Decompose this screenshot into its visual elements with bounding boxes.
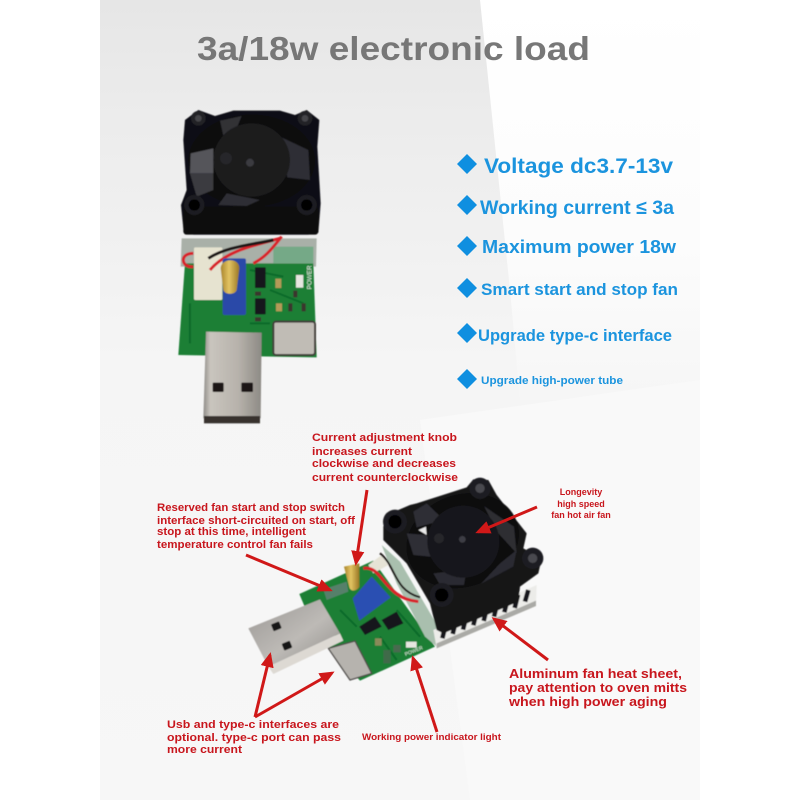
power marking: POWER xyxy=(404,645,424,658)
fan xyxy=(383,478,543,633)
heat sink side xyxy=(382,545,440,647)
black chips xyxy=(255,267,266,314)
chips and components xyxy=(359,612,417,663)
fan xyxy=(181,110,321,235)
feature: working current: Working current ≤ 3a xyxy=(480,197,674,219)
feature: voltage: Voltage dc3.7-13v xyxy=(484,155,673,178)
power marking: POWER xyxy=(306,265,313,289)
circuit board xyxy=(299,561,435,681)
feature: type-c: Upgrade type-c interface xyxy=(478,327,672,345)
heat sink xyxy=(181,238,317,267)
arrow: heat sink xyxy=(494,619,548,660)
arrow: fan switch xyxy=(246,555,330,590)
callout: fan: high speed xyxy=(557,499,605,509)
callout: heat sheet: when high power aging xyxy=(508,694,667,709)
USB-A plug xyxy=(203,332,262,423)
callout: USB and type-c: Usb and type-c interfaces are xyxy=(167,719,339,731)
callout: current adjustment knob: Current adjustment knob xyxy=(312,432,457,444)
callout: heat sheet: Aluminum fan heat sheet, xyxy=(509,666,682,681)
callout: power indicator: Working power indicator light xyxy=(362,732,501,742)
product photo: angled view of electronic load xyxy=(248,478,543,681)
feature: high-power tube: Upgrade high-power tube xyxy=(481,375,623,387)
callout: reserved fan switch: Reserved fan start and stop switch xyxy=(157,502,345,514)
callout: current adjustment knob: increases current xyxy=(312,446,412,458)
product photo: top view of electronic load xyxy=(178,110,321,423)
feature: maximum power: Maximum power 18w xyxy=(482,237,677,257)
callout: reserved fan switch: interface short-circuited on start, off xyxy=(157,515,355,527)
USB-C port xyxy=(328,641,372,680)
feature list xyxy=(457,154,678,389)
wires xyxy=(183,237,282,270)
wires xyxy=(363,568,418,602)
callout: current adjustment knob: current counterclockwise xyxy=(312,472,458,484)
blue potentiometer xyxy=(223,258,246,315)
arrow: knob xyxy=(356,490,367,563)
callout: reserved fan switch: temperature control fan fails xyxy=(157,539,313,551)
blue potentiometer xyxy=(353,577,391,621)
callout: heat sheet: pay attention to oven mitts xyxy=(509,680,687,695)
background panel xyxy=(100,0,700,800)
callout: current adjustment knob: clockwise and decreases xyxy=(312,458,456,470)
arrow: power light xyxy=(413,658,437,732)
callout: reserved fan switch: stop at this time, intelligent xyxy=(157,526,306,538)
callout: fan: Longevity xyxy=(560,487,602,497)
callout arrows xyxy=(246,490,548,732)
feature: high-power tube xyxy=(457,369,623,389)
gold knob xyxy=(344,563,359,591)
callout: USB and type-c: optional. type-c port can pass xyxy=(167,732,341,744)
white connector xyxy=(368,555,388,573)
fan switch header xyxy=(323,582,348,600)
circuit board xyxy=(178,263,317,357)
title: 3a/18w electronic load xyxy=(197,30,590,67)
arrow: fan xyxy=(478,507,537,532)
gold knob xyxy=(221,260,239,294)
feature: smart fan: Smart start and stop fan xyxy=(481,280,678,299)
callout: fan: fan hot air fan xyxy=(551,510,611,520)
USB-A plug xyxy=(248,599,343,674)
white fan connector xyxy=(194,247,222,300)
arrow: USB port xyxy=(255,655,270,717)
components xyxy=(255,275,306,321)
heat sink xyxy=(433,585,537,648)
callout: USB and type-c: more current xyxy=(167,744,242,756)
arrow: type-c port xyxy=(255,673,332,717)
USB-C port xyxy=(273,322,315,355)
